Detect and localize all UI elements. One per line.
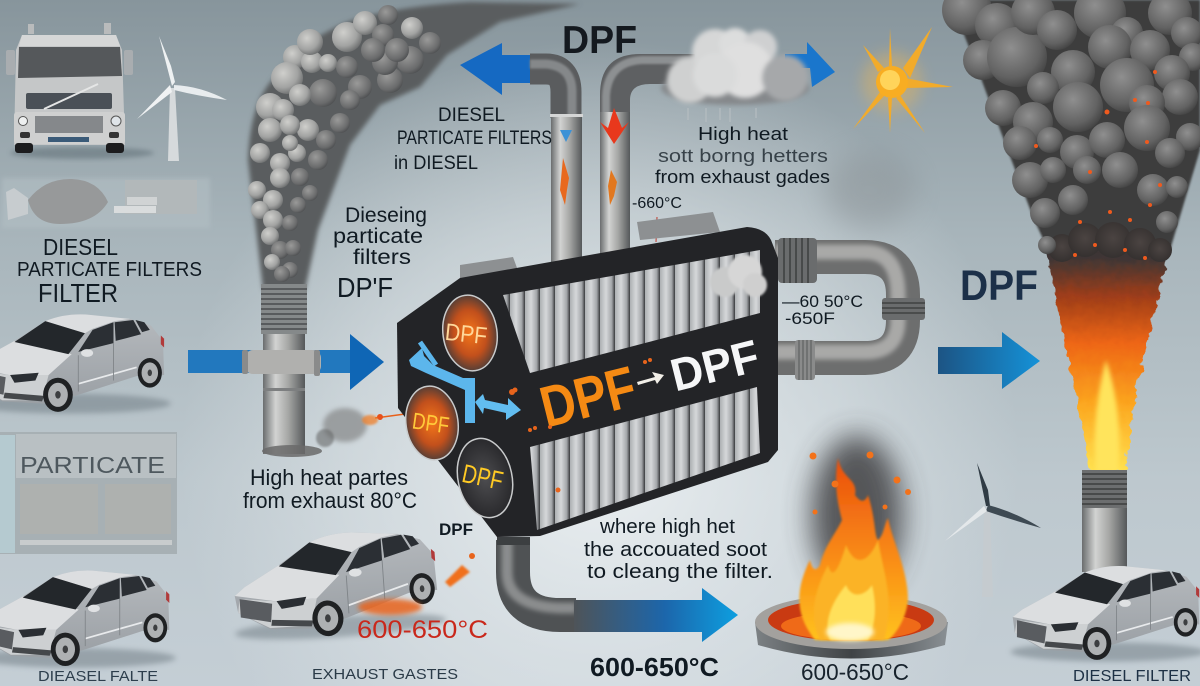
icon: sun: [853, 27, 953, 133]
text: high heat partes: [243, 465, 417, 513]
chimney pipe left: [188, 284, 384, 457]
filter unit: [397, 212, 778, 537]
filter port: top: [438, 292, 502, 374]
text: dieseing particate filters: particate: [333, 225, 423, 248]
smoke plume right: [942, 0, 1200, 262]
flame from right chimney: [1040, 225, 1172, 472]
text: diesel particate filters filter: [17, 234, 202, 308]
title: DPF top: DPF: [562, 19, 637, 62]
filter port: top: DPF: [444, 319, 488, 350]
text: diesel particate filters filter: PARTICATE FILTERS: [17, 259, 202, 281]
text: dieseing particate filters: DP'F: [337, 272, 393, 303]
right side pipes: [775, 238, 925, 380]
text: where high het: the accouated soot: [584, 539, 767, 561]
exhaust flare from car: [358, 553, 475, 615]
icon: car lower right: [1011, 566, 1200, 661]
orange DPF label: DPF: [534, 354, 643, 440]
fins: bottom row: [530, 387, 760, 530]
sparks: [509, 358, 652, 492]
smoke plume left: [248, 2, 580, 290]
panel: particate sign: [0, 432, 177, 554]
label: red temperature: 600-650°C: [357, 616, 488, 644]
text: diesel particate filters filter: FILTER: [38, 278, 118, 308]
label: 600-650 centre: 600-650°C: [590, 652, 719, 682]
white DPF label: DPF: [665, 329, 764, 401]
label: DPF right: DPF: [960, 262, 1038, 310]
burner with flame: [755, 435, 948, 658]
text: high heat partes: from exhaust 80°C: [243, 488, 417, 513]
text: diesel particate filters in diesel: in DIESEL: [394, 153, 478, 174]
label: temperature right side: —60 50°C: [782, 292, 863, 311]
label: particate: PARTICATE: [20, 452, 165, 478]
text: dieseing particate filters: [333, 204, 427, 303]
label: temperature right side: [782, 292, 863, 328]
label: 600-650 right: 600-650°C: [801, 659, 909, 685]
text: diesel falte: DIEASEL FALTE: [38, 668, 158, 685]
arrows: blue flow: [409, 342, 521, 423]
icon: wind turbine lower right: [945, 463, 1041, 597]
icon: wind turbine top left: [137, 36, 227, 161]
filter port: bottom: [450, 433, 520, 523]
text: diesel particate filters in diesel: DIESEL: [438, 105, 505, 126]
text: diesel filter: DIESEL FILTER: [1073, 668, 1191, 685]
text: where high het: to cleang the filter.: [587, 561, 773, 583]
icon: car centre: [229, 526, 447, 644]
text: high heat partes: High heat partes: [250, 465, 408, 490]
icon: cloud: [661, 28, 809, 122]
text: where high het: [584, 516, 773, 583]
filter port: middle: DPF: [411, 408, 451, 438]
text: high heat from exhaust: sott borng hetters: [658, 146, 828, 166]
arrow: blue right: [938, 332, 1040, 389]
text: diesel particate filters in diesel: [394, 105, 552, 174]
text: diesel particate filters filter: DIESEL: [43, 234, 118, 260]
icon: car lower left: [0, 570, 176, 668]
text: high heat from exhaust: [655, 124, 830, 187]
icon: filter sketch: [2, 178, 210, 228]
label: temperature near pipe: [632, 195, 682, 242]
label: temperature right side: -650F: [785, 309, 835, 328]
arrow: orange spark to filter: [362, 414, 405, 425]
text: dieseing particate filters: Dieseing: [345, 204, 427, 227]
fins: top row: [503, 250, 760, 373]
top outlet pipes with arrows: [460, 42, 835, 265]
text: where high het: where high het: [599, 516, 735, 538]
bottom pipe with arrow: [497, 537, 738, 642]
arrow: white: [637, 372, 664, 385]
text: diesel particate filters in diesel: PARTICATE FILTERS: [397, 128, 552, 149]
filter port: bottom: DPF: [460, 458, 506, 496]
text: exhaust gastes: EXHAUST GASTES: [312, 666, 458, 683]
filter port: middle: [401, 383, 463, 463]
icon: truck: [6, 23, 154, 159]
text: high heat from exhaust: from exhaust gades: [655, 167, 830, 187]
icon: car upper left: [0, 314, 171, 414]
label: temperature near pipe: -660°C: [632, 195, 682, 212]
chimney right: [1082, 470, 1127, 572]
text: dieseing particate filters: filters: [353, 246, 411, 269]
text: high heat from exhaust: High heat: [698, 124, 788, 144]
label: small DPF: DPF: [439, 520, 473, 539]
